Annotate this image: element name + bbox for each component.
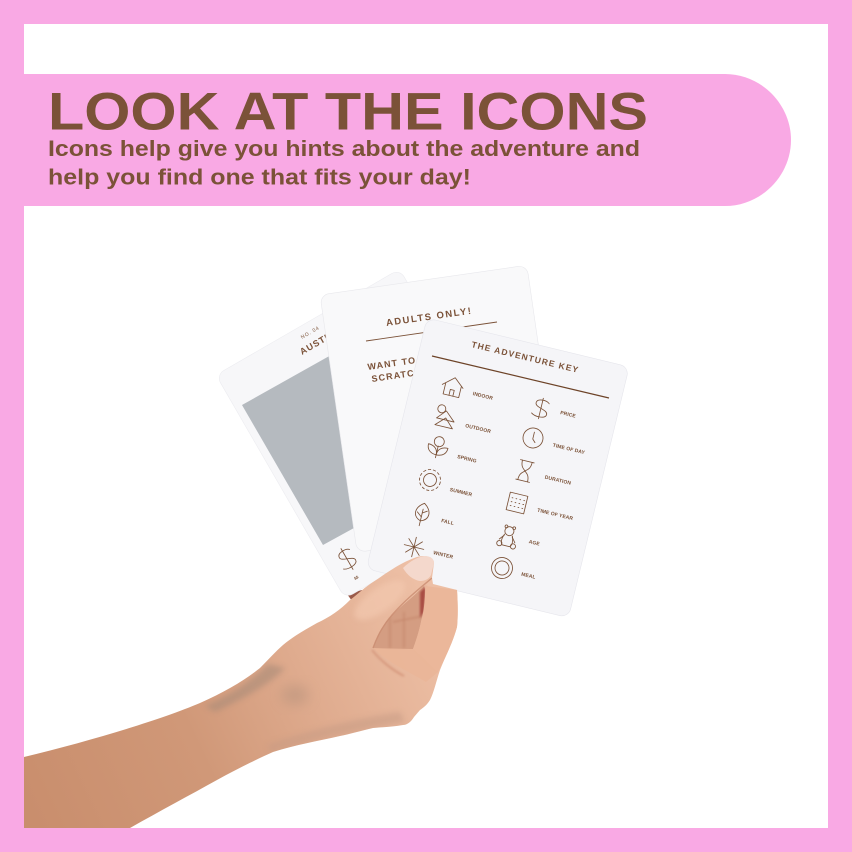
label: price: PRICE <box>560 410 577 420</box>
label: winter: WINTER <box>433 550 454 561</box>
label: duration: DURATION <box>544 475 572 487</box>
thumb highlight <box>356 584 402 619</box>
lower palm fold <box>374 648 437 674</box>
label: summer: SUMMER <box>449 487 473 498</box>
label: age: AGE <box>528 539 541 548</box>
palm crease <box>372 650 404 676</box>
icon: flower <box>426 434 450 460</box>
middle card <box>320 265 564 552</box>
arm and hand silhouette <box>24 556 458 828</box>
scratch-off panel <box>242 350 405 545</box>
back card <box>216 269 529 598</box>
heading rule <box>366 322 497 341</box>
icon: sun <box>417 467 443 493</box>
card city: AUSTIN <box>298 328 337 357</box>
label: spring: SPRING <box>457 454 477 465</box>
subtitle <box>48 136 640 190</box>
wrist shadow <box>205 664 285 712</box>
label: time of year: TIME OF YEAR <box>537 508 574 522</box>
icon: clock <box>521 426 545 450</box>
inner fingers <box>373 586 424 650</box>
card title: THE ADVENTURE KEY <box>471 339 580 375</box>
price label: $$ <box>353 574 360 581</box>
card heading: ADULTS ONLY! <box>385 306 473 329</box>
subtitle: Icons help give you hints about the adventure and <box>48 136 640 161</box>
label: fall: FALL <box>441 518 454 527</box>
icon: dollar <box>531 396 550 420</box>
card number: NO. 04 <box>300 325 321 341</box>
title: LOOK AT THE ICONS <box>48 82 648 142</box>
subtitle: help you find one that fits your day! <box>48 164 471 190</box>
dark sliver behind back card <box>347 590 366 601</box>
icon: winter <box>402 535 426 559</box>
icon: calendar <box>506 492 528 514</box>
card text <box>367 355 423 384</box>
label: meal: MEAL <box>521 572 536 581</box>
icon: house <box>440 375 465 398</box>
icon: outdoor <box>434 404 457 429</box>
fanned cards <box>216 265 629 618</box>
front card: the adventure key <box>366 318 629 618</box>
icon: leaf <box>413 502 431 527</box>
label: indoor: INDOOR <box>472 391 494 402</box>
label: time of day: TIME OF DAY <box>552 443 586 456</box>
label: outdoor: OUTDOOR <box>465 423 492 435</box>
dark shadow beside finger <box>420 586 426 618</box>
thumbnail <box>403 556 434 581</box>
thumb lower edge shadow <box>373 578 432 648</box>
icon: hourglass <box>516 460 534 482</box>
card text: SCRATCH <box>371 367 423 384</box>
icon: teddy bear <box>496 524 520 550</box>
header banner <box>24 74 791 206</box>
front finger <box>413 586 458 672</box>
hand shading <box>205 573 458 752</box>
hand holding the cards <box>24 556 458 828</box>
card text: WANT TO <box>367 355 417 372</box>
icon: plate <box>489 555 515 581</box>
banner shape <box>24 74 791 206</box>
icon: price <box>334 545 359 573</box>
title rule <box>432 356 609 398</box>
inner finger crease <box>390 614 422 646</box>
